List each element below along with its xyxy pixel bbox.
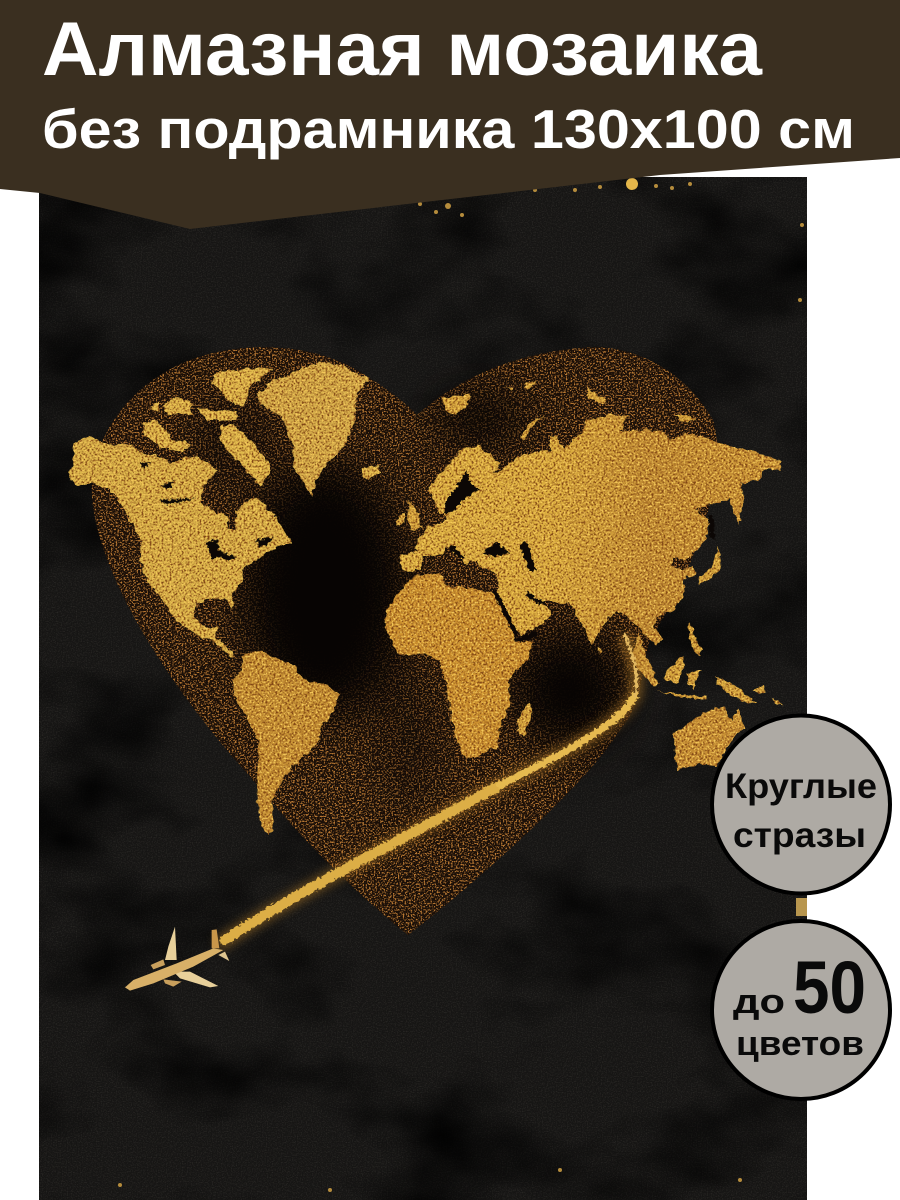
header banner — [0, 0, 900, 229]
world map — [68, 362, 783, 835]
greenland — [257, 362, 370, 497]
badge: up to 50 colours: 50 — [793, 946, 866, 1029]
badge: up to 50 colours: до — [733, 983, 785, 1021]
dark ocean shading — [190, 394, 630, 810]
islands — [395, 382, 783, 737]
inland seas and fine coast cuts — [140, 462, 715, 643]
canadian arctic islands — [143, 368, 273, 487]
great lakes and canada cuts — [140, 462, 273, 561]
dark canvas background — [39, 177, 807, 1200]
australia — [673, 707, 745, 770]
gold flecks on canvas — [118, 178, 807, 1192]
poster artwork — [39, 177, 807, 1200]
contrail to plane — [218, 635, 636, 945]
badge: up to 50 colours — [712, 921, 890, 1099]
north america — [68, 437, 292, 657]
south america — [233, 650, 338, 835]
eurasia — [400, 415, 782, 645]
heart with speckled gold dust — [92, 347, 717, 935]
subtitle: без подрамника 130х100 см — [42, 98, 855, 160]
eastern hemisphere — [385, 382, 783, 770]
africa — [385, 573, 533, 758]
malay peninsula — [632, 633, 658, 687]
title: Алмазная мозаика — [42, 7, 763, 92]
badge: round rhinestones: Круглые — [725, 767, 877, 806]
badge: round rhinestones — [712, 716, 890, 894]
eurasian seas — [443, 470, 715, 643]
iceland — [362, 466, 381, 479]
badge: up to 50 colours: цветов — [736, 1025, 864, 1063]
icon: airplane — [125, 927, 229, 991]
badge: round rhinestones: стразы — [733, 816, 866, 855]
americas and greenland — [68, 362, 381, 835]
